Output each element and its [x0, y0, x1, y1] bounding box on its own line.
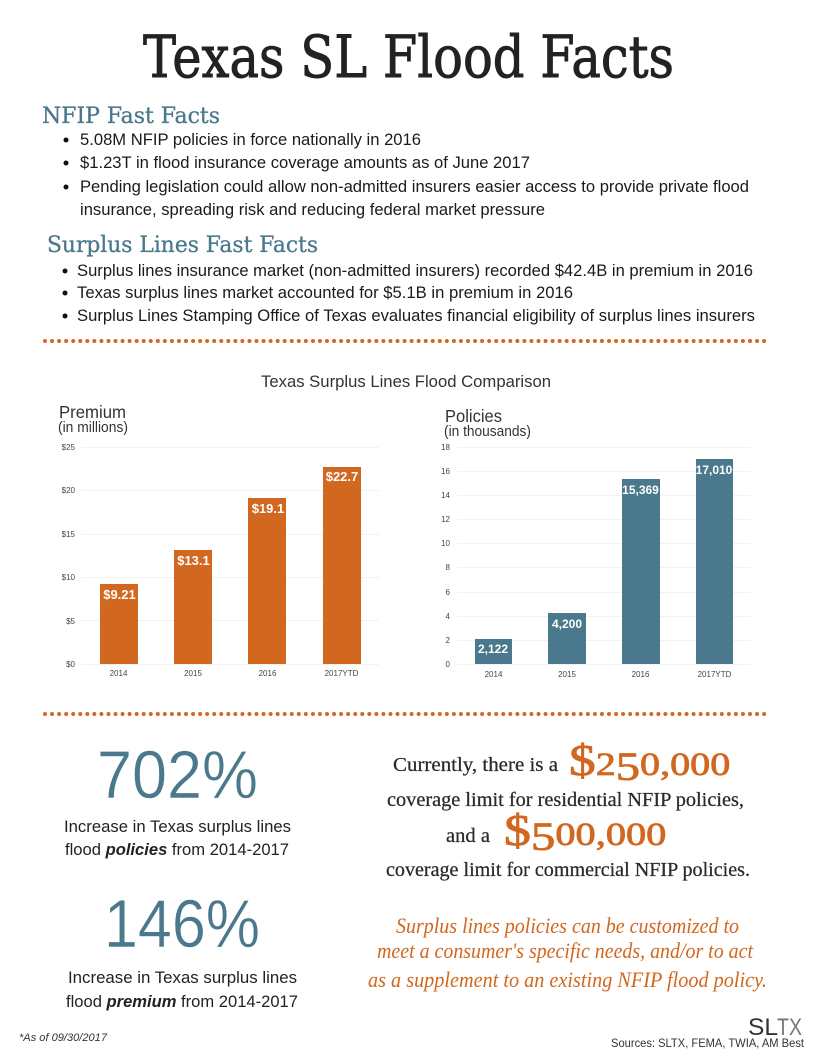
- callout: customized policies: as a supplement to an existing NFIP flood policy.: [368, 967, 767, 992]
- title: Texas SL Flood Facts: [143, 23, 674, 91]
- stat: 146%: 146%: [104, 886, 260, 962]
- bar chart: premium: $5: [66, 617, 76, 626]
- bar chart: policies: 10: [441, 539, 451, 548]
- bullet list: surplus lines facts: Texas surplus lines market accounted for $5.1B in premium in 2016: [77, 284, 573, 302]
- bar chart: premium: $0: [66, 660, 76, 669]
- footnote: *As of 09/30/2017: [19, 1032, 108, 1044]
- coverage limits text block: coverage limit for residential NFIP policies,: [387, 789, 744, 811]
- bar chart: premium: $19.1: [252, 501, 284, 516]
- bar chart: policies: 8: [446, 563, 451, 572]
- logo: SLTX: TX: [777, 1014, 802, 1041]
- callout: customized policies: [368, 913, 767, 992]
- chart title: premium: Premium: [59, 402, 126, 422]
- bar chart: premium: $10: [62, 573, 76, 582]
- heading: NFIP Fast Facts: NFIP Fast Facts: [42, 104, 220, 129]
- coverage limits text block: 00,000: [555, 815, 666, 852]
- bar chart: premium: $15: [62, 530, 76, 539]
- bullet list: NFIP facts: insurance, spreading risk and reducing federal market pressure: [80, 201, 545, 219]
- bar chart: premium: $22.7: [326, 469, 358, 484]
- bar chart: premium: [58, 402, 379, 678]
- stat caption: policies: [64, 817, 291, 859]
- coverage limits text block: $: [504, 806, 531, 855]
- bar chart: policies: 14: [441, 491, 451, 500]
- coverage limits text block: $2: [569, 735, 616, 785]
- bar chart: policies: 6: [446, 588, 451, 597]
- bar chart: policies: 12: [441, 515, 451, 524]
- stat: 146%: [66, 886, 298, 1011]
- stat: 702%: 702%: [97, 737, 258, 813]
- stat caption: premium: flood premium from 2014-2017: [66, 992, 298, 1011]
- coverage limits text block: and a: [446, 825, 490, 847]
- callout: customized policies: Surplus lines policies can be customized to: [396, 913, 739, 938]
- bar chart: policies: 2016: [632, 670, 650, 679]
- chart title: premium: (in millions): [58, 420, 128, 436]
- bar chart: policies: [441, 406, 751, 679]
- bar chart: policies: 4,200: [552, 617, 582, 631]
- coverage limits text block: Currently, there is a: [393, 754, 558, 776]
- bullet list: NFIP facts: [64, 131, 749, 219]
- coverage limits text block: [386, 735, 750, 881]
- stat caption: premium: [66, 968, 298, 1011]
- bar chart: premium: 2015: [184, 669, 202, 678]
- coverage limits text block: 5: [531, 814, 555, 859]
- panel: NFIP fast facts: [42, 104, 749, 219]
- bar chart: premium: $20: [62, 486, 76, 495]
- stat: 702%: [64, 737, 291, 859]
- chart heading: Texas Surplus Lines Flood Comparison: [261, 372, 551, 391]
- bar chart: policies: 16: [441, 467, 451, 476]
- bar chart: policies: 2: [446, 636, 451, 645]
- callout: customized policies: meet a consumer's specific needs, and/or to act: [377, 938, 754, 963]
- bar chart: policies: 17,010: [696, 463, 733, 477]
- bar chart: policies: 15,369: [622, 483, 659, 497]
- stat caption: policies: Increase in Texas surplus lines: [64, 817, 291, 836]
- bullet list: NFIP facts: Pending legislation could allow non-admitted insurers easier access to provide private flood: [80, 178, 749, 196]
- heading: Surplus Lines Fast Facts: Surplus Lines Fast Facts: [47, 233, 318, 258]
- bar chart: premium: 2014: [110, 669, 128, 678]
- bar chart: policies: 0: [446, 660, 451, 669]
- bar chart: premium: 2017YTD: [325, 669, 359, 678]
- bullet list: surplus lines facts: Surplus Lines Stamping Office of Texas evaluates financial eligibility of surplus lines insurers: [77, 307, 755, 325]
- bar chart: policies: 18: [441, 443, 451, 452]
- coverage limits text block: coverage limit for commercial NFIP policies.: [386, 859, 750, 881]
- bullet list: NFIP facts: 5.08M NFIP policies in force nationally in 2016: [80, 131, 421, 149]
- bullet list: surplus lines facts: Surplus lines insurance market (non-admitted insurers) recorded $42.4B in premium in 2016: [77, 262, 753, 280]
- bar chart: policies: 2,122: [478, 642, 508, 656]
- logo: SLTX: [748, 1014, 802, 1041]
- bar chart: premium: 2016: [259, 669, 277, 678]
- chart title: premium: [58, 402, 128, 436]
- bullet list: surplus lines facts: [62, 262, 755, 325]
- chart title: policies: [444, 406, 531, 440]
- chart title: policies: (in thousands): [444, 424, 531, 440]
- chart title: policies: Policies: [445, 406, 502, 426]
- sources: Sources: SLTX, FEMA, TWIA, AM Best: [611, 1038, 805, 1050]
- bar chart: premium: $9.21: [103, 587, 136, 602]
- stat caption: policies: flood policies from 2014-2017: [65, 840, 289, 859]
- bar chart: premium: $13.1: [177, 553, 210, 568]
- stat caption: premium: Increase in Texas surplus lines: [68, 968, 297, 987]
- bar chart: policies: 2017YTD: [698, 670, 732, 679]
- bar chart: policies: 4: [446, 612, 451, 621]
- bar chart: premium: $25: [62, 443, 76, 452]
- panel: surplus lines fast facts: [47, 233, 755, 325]
- coverage limits text block: 0,000: [640, 745, 730, 782]
- logo: SLTX: SL: [748, 1014, 778, 1041]
- bar chart: policies: 2014: [485, 670, 503, 679]
- bullet list: NFIP facts: $1.23T in flood insurance coverage amounts as of June 2017: [80, 154, 530, 172]
- coverage limits text block: 5: [616, 744, 640, 789]
- bar chart: policies: 2015: [558, 670, 576, 679]
